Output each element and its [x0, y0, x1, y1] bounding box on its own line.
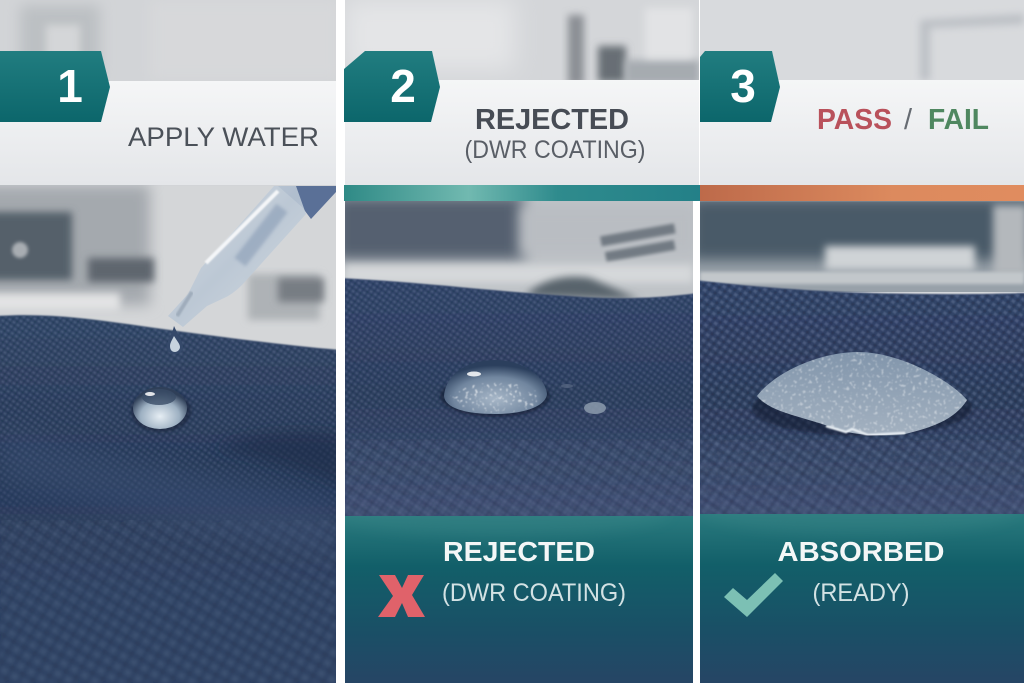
- step 3 header band: [700, 80, 1024, 201]
- step 1 title: APPLY WATER: [128, 122, 319, 152]
- teal accent bar: [344, 185, 700, 201]
- step 3 badge: [700, 51, 780, 122]
- panel: step 2 rejected: [330, 0, 700, 683]
- step 2 badge: 2: [390, 60, 416, 112]
- step 2 subtitle: (DWR COATING): [464, 136, 646, 164]
- result heading: absorbed: ABSORBED: [778, 536, 944, 567]
- icon: red X: [378, 575, 425, 617]
- step 3 badge: 3: [730, 60, 756, 112]
- step 1 header band: [0, 81, 336, 185]
- fabric, step 2: [340, 278, 698, 520]
- result panel highlight: [330, 488, 670, 536]
- step 1 badge: 1: [57, 60, 83, 112]
- result sub-label: ready: (READY): [812, 579, 910, 607]
- step 3 title: pass / fail: FAIL: [928, 104, 989, 136]
- result panel highlight: [700, 486, 1020, 534]
- step 3 title: pass / fail: PASS: [817, 104, 892, 136]
- step 2 badge: [344, 51, 440, 122]
- icon: check mark: [724, 573, 783, 617]
- icon: water bead on coated fabric: [440, 360, 606, 417]
- lab background, step 3: [690, 0, 1024, 300]
- icon: pipette: [168, 186, 336, 327]
- result sub-label: DWR coating: (DWR COATING): [442, 579, 626, 607]
- orange accent bar: [700, 185, 1024, 201]
- fabric, step 1: [0, 315, 345, 683]
- step 3 result panel: [700, 514, 1024, 683]
- icon: falling water drop: [167, 326, 183, 354]
- panel: step 3 absorbed: [690, 0, 1024, 683]
- step 3 title: pass / fail: /: [904, 104, 913, 136]
- step 1 badge: [0, 51, 110, 122]
- step 2 header band: [344, 80, 700, 201]
- step 2 title: REJECTED: [475, 104, 629, 136]
- icon: bead of water on fabric: [131, 387, 191, 432]
- fabric, step 3: [695, 280, 1024, 520]
- lab background, step 2: [335, 0, 700, 300]
- icon: absorbed water patch: [752, 352, 972, 436]
- step 3 title: pass / fail: [817, 104, 989, 136]
- panel: step 1 apply water: [0, 0, 345, 683]
- step 2 result panel: [345, 516, 693, 683]
- lab background, step 1: [0, 0, 340, 350]
- result heading: rejected: REJECTED: [443, 536, 595, 567]
